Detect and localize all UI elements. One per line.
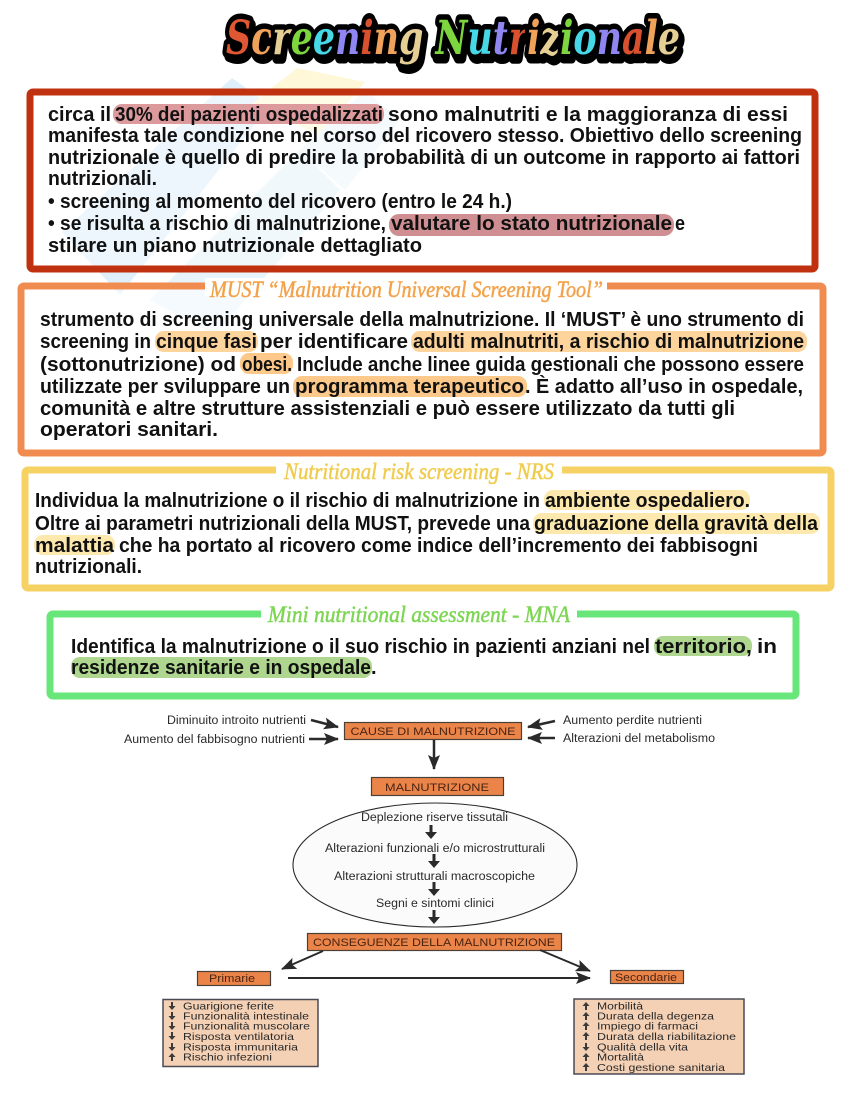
list: primary consequences: Risposta immunitaria [183,1042,298,1054]
panel: introduction: nutrizionali. [48,168,157,190]
panel: MNA: Mini nutritional assessment - MNA [267,602,571,627]
panel: introduction: • screening al momento del ricovero (entro le 24 h.) [48,191,512,213]
panel: NRS: ambiente ospedaliero. [545,490,750,512]
list: primary consequences: Guarigione ferite [183,1000,274,1012]
panel: NRS [25,459,831,588]
causes on the left [124,715,338,746]
panel: NRS: Oltre ai parametri nutrizionali della MUST, prevede una [35,513,531,535]
panel: NRS: Individua la malnutrizione o il rischio di malnutrizione in [35,490,540,512]
list: secondary consequences [574,999,744,1074]
ellipse: progression stages: Segni e sintomi clinici [376,898,494,910]
panel: introduction: valutare lo stato nutrizionale [391,213,672,235]
panel: MUST: operatori sanitari. [40,419,218,441]
box: conseguenze: CONSEGUENZE DELLA MALNUTRIZIONE [313,937,555,949]
panel: introduction: sono malnutriti e la maggioranza di essi [388,104,788,126]
panel: introduction: manifesta tale condizione nel corso del ricovero stesso. Obiettivo dello screening [48,125,802,147]
panel: MNA [50,602,796,696]
watermark [62,68,400,335]
list: secondary consequences: Qualità della vita [597,1042,688,1054]
panel: NRS: nutrizionali. [35,556,142,578]
panel: MNA: in [757,636,777,658]
arrow: to primarie [282,951,323,969]
panel: MNA: Identifica la malnutrizione o il suo rischio in pazienti anziani nel [71,636,650,658]
list: secondary consequences: Morbilità [597,1000,643,1012]
panel: MUST: screening in [40,331,151,353]
title: Screening Nutrizionale [226,11,680,66]
list: primary consequences: Funzionalità muscolare [183,1020,310,1032]
panel: MUST: programma terapeutico [295,376,524,398]
box: cause di malnutrizione [344,722,522,740]
ellipse: progression stages: Alterazioni funzionali e/o microstrutturali [325,843,545,855]
panel: introduction: 30% dei pazienti ospedalizzati [115,104,383,126]
box: primarie: Primarie [209,973,255,985]
causes on the right: Aumento perdite nutrienti [563,715,702,727]
panel: MUST: utilizzate per sviluppare un [40,376,290,398]
causes on the left: Diminuito introito nutrienti [167,715,306,727]
list: primary consequences: Risposta ventilatoria [183,1031,294,1043]
panel: MUST: comunità e altre strutture assistenziali e può essere utilizzato da tutti gli [40,398,735,420]
list: secondary consequences: Durata della riabilitazione [597,1031,736,1043]
list: secondary consequences: Durata della degenza [597,1010,714,1022]
panel: MUST: cinque fasi [156,331,257,353]
arrow: primarie to secondarie [288,977,590,979]
arrow: causes to malnutrition [433,740,435,769]
causes on the right: Alterazioni del metabolismo [563,733,715,745]
panel: MNA: territorio, [655,636,752,658]
panel: MUST: . È adatto all’uso in ospedale, [525,375,803,398]
panel: MUST: MUST “Malnutrition Universal Screening Tool” [209,277,603,302]
box: conseguenze [308,934,562,950]
panel: introduction [30,92,815,269]
panel: MUST: obesi. [242,354,292,376]
ellipse: progression stages: Deplezione riserve tissutali [361,812,508,824]
box: cause di malnutrizione: CAUSE DI MALNUTRIZIONE [350,726,516,738]
panel: NRS: graduazione della gravità della [534,513,819,535]
panel: introduction: e [675,213,685,235]
ellipse: progression stages: Alterazioni strutturali macroscopiche [334,871,535,883]
causes on the left: Aumento del fabbisogno nutrienti [124,734,305,746]
panel: MUST: adulti malnutriti, a rischio di malnutrizione [413,331,804,353]
flow chart: malnutrition [124,715,744,1074]
list: secondary consequences: Impiego di farmaci [597,1020,698,1032]
panel: MNA: . [371,657,377,679]
panel: NRS: Nutritional risk screening - NRS [283,459,554,484]
panel: MUST: Include anche linee guida gestionali che possono essere [297,354,804,376]
list: primary consequences [163,1000,318,1066]
ellipse: progression stages [293,803,577,927]
box: primarie [198,972,270,986]
panel: introduction: stilare un piano nutrizionale dettagliato [48,235,422,257]
arrow: to secondarie [540,950,590,971]
panel: NRS: malattia [35,535,115,557]
panel: introduction: • se risulta a rischio di malnutrizione, [48,213,386,235]
causes on the right [528,715,715,745]
panel: NRS: che ha portato al ricovero come indice dell’incremento dei fabbisogni [119,535,758,557]
panel: introduction: circa il [48,104,111,126]
box: malnutrizione [372,778,504,796]
list: secondary consequences: Mortalità [597,1052,644,1064]
list: primary consequences: Rischio infezioni [183,1052,272,1064]
box: malnutrizione: MALNUTRIZIONE [385,782,489,794]
box: secondarie [610,970,684,984]
box: secondarie: Secondarie [615,972,677,984]
list: secondary consequences: Costi gestione sanitaria [597,1062,725,1074]
panel: MUST [21,277,823,453]
panel: MUST: per identificare [260,331,408,353]
panel: MUST: strumento di screening universale della malnutrizione. Il ‘MUST’ è uno strumento di [40,309,804,331]
list: primary consequences: Funzionalità intestinale [183,1010,309,1022]
panel: MNA: residenze sanitarie e in ospedale [71,657,371,679]
panel: introduction: nutrizionale è quello di predire la probabilità di un outcome in rapporto ai fattori [48,147,800,169]
panel: MUST: (sottonutrizione) od [40,354,236,376]
